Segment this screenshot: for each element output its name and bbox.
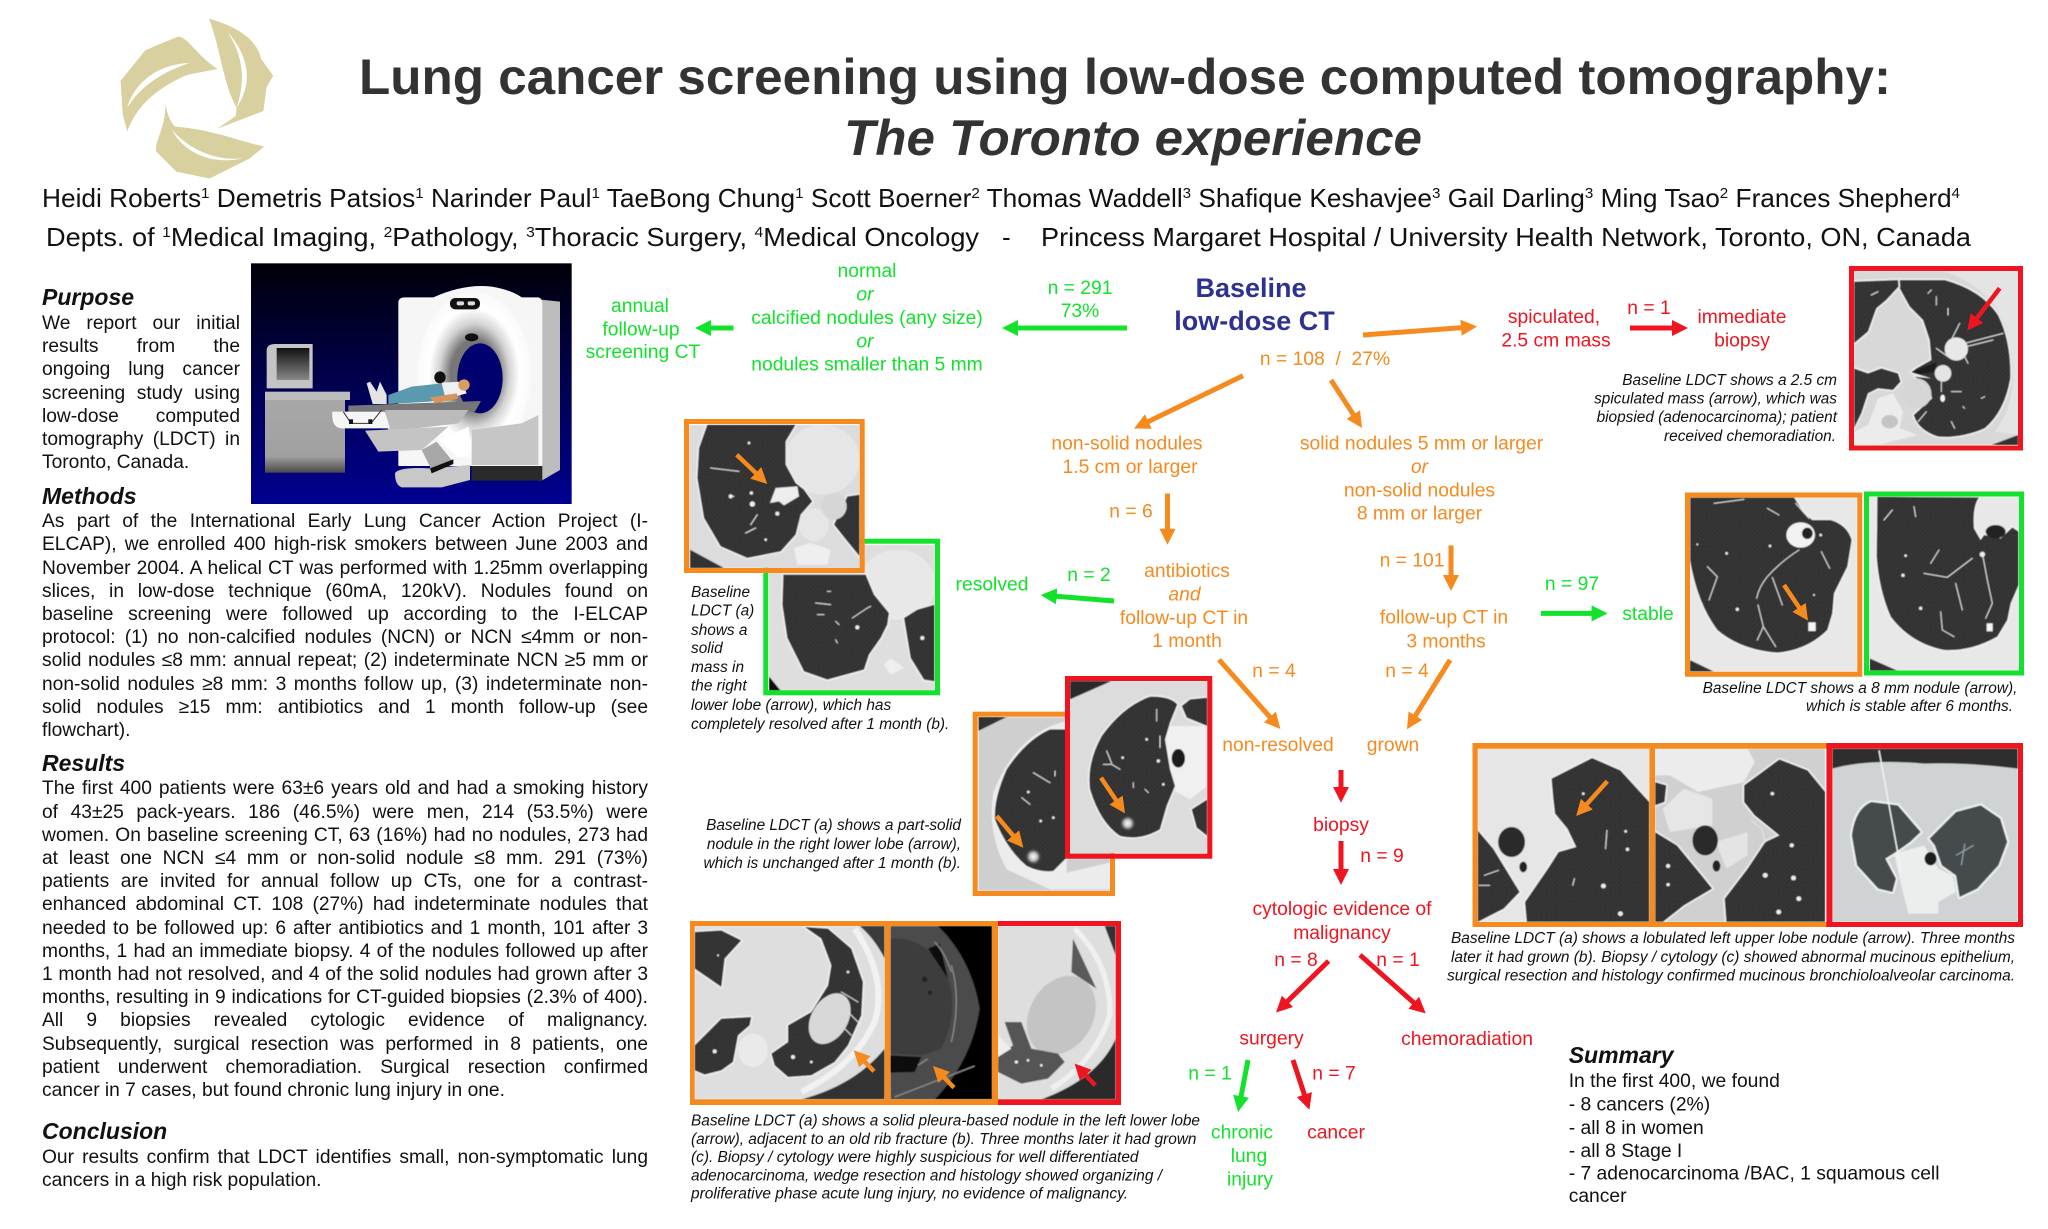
methods text: As part of the International Early Lung Cancer Action Project (I-: [42, 511, 648, 532]
red branch: biopsy and malignancy: n = 9: [1360, 846, 1404, 867]
authors: 1: [592, 185, 600, 202]
caption: resolved mass: Baseline: [691, 584, 750, 601]
caption: stable nodule: which is stable after 6 months.: [1806, 698, 2013, 715]
purpose text: ongoing lung cancer: [42, 359, 240, 380]
red branch: spiculated mass: biopsy: [1714, 331, 1770, 352]
arrow: to non-resolved: [1219, 660, 1277, 725]
affiliations: Depts. of: [46, 222, 150, 252]
green branch: normal findings: calcified nodules (any size): [751, 308, 983, 329]
orange branch: solid nodules: non-solid nodules: [1344, 480, 1495, 502]
summary list: In the first 400, we found: [1569, 1071, 1780, 1092]
results text: at least one NCN ≤4 mm or non-solid nodule ≤8 mm. 291 (73%): [42, 848, 648, 869]
authors: 1: [795, 185, 804, 202]
orange branch: non-solid nodules: antibiotics: [1144, 561, 1230, 582]
image arrows: [997, 778, 1122, 844]
authors: Demetris Patsios: [210, 183, 415, 213]
red branch: spiculated mass: 2.5 cm mass: [1501, 331, 1611, 352]
results text: patient underwent chemoradiation. Surgical resection confirmed: [42, 1057, 648, 1078]
CT images: lobulated nodule triple: [1472, 743, 2023, 927]
authors: 2: [1720, 185, 1728, 202]
authors: Gail Darling: [1440, 183, 1585, 213]
arrow: to chemoradiation: [1360, 955, 1422, 1010]
orange branch: solid nodules: grown: [1367, 735, 1419, 756]
caption: resolved mass: [691, 584, 949, 733]
resolved outcome: resolved: [956, 574, 1028, 596]
orange branch: solid nodules: 8 mm or larger: [1357, 504, 1483, 524]
authors: Scott Boerner: [804, 183, 972, 213]
CT images: resolved mass, green and orange frames: [686, 422, 938, 693]
orange branch: solid nodules: follow-up CT in: [1380, 608, 1508, 628]
caption: part-solid nodule: Baseline LDCT (a) shows a part-solid: [706, 817, 961, 834]
methods text: baseline screening were followed up according to the I-ELCAP: [42, 604, 648, 625]
results text: [42, 778, 648, 1101]
green branch: normal findings: screening CT: [586, 342, 701, 363]
caption: lobulated nodule: [1447, 930, 2015, 985]
arrow: to grown: [1410, 660, 1450, 725]
red branch: biopsy and malignancy: biopsy: [1313, 815, 1369, 836]
chronic lung injury outcome: chronic: [1211, 1122, 1273, 1144]
caption: pleura-based nodule: Baseline LDCT (a) shows a solid pleura-based nodule in the left lower lobe: [691, 1112, 1200, 1130]
results heading: Results: [42, 750, 125, 776]
red branch: spiculated mass: immediate: [1698, 307, 1786, 328]
caption: pleura-based nodule: (c). Biopsy / cytology were highly suspicious for well differentiated: [691, 1149, 1139, 1166]
methods text: flowchart).: [42, 720, 130, 741]
summary list: - all 8 in women: [1569, 1118, 1704, 1139]
conclusion text: Our results confirm that LDCT identifies small, non-symptomatic lung: [42, 1147, 648, 1168]
panel: summary: [1569, 1042, 1940, 1207]
summary list: - 7 adenocarcinoma /BAC, 1 squamous cell: [1569, 1164, 1940, 1184]
purpose heading: Purpose: [42, 284, 134, 310]
red branch: biopsy and malignancy: chemoradiation: [1401, 1029, 1533, 1050]
orange branch: solid nodules: solid nodules 5 mm or larger: [1300, 434, 1544, 454]
green branch: normal findings: 73%: [1061, 301, 1099, 322]
arrow: to cancer: [1293, 1060, 1308, 1105]
image arrows: [857, 1054, 1095, 1088]
stable outcome: stable: [1622, 604, 1674, 625]
red branch: biopsy and malignancy: n = 7: [1312, 1064, 1356, 1084]
caption: pleura-based nodule: adenocarcinoma, wedge resection and histology showed organizing /: [691, 1167, 1164, 1184]
authors: 1: [201, 185, 210, 202]
caption: lobulated nodule: later it had grown (b). Biopsy / cytology (c) showed abnormal mucinous epithelium,: [1451, 949, 2015, 966]
purpose text: tomography (LDCT) in: [42, 429, 240, 450]
arrow: to annual follow-up: [700, 326, 734, 330]
affiliations: -: [1002, 222, 1011, 252]
orange branch: solid nodules: n = 4: [1385, 661, 1429, 682]
affiliations: [46, 222, 1972, 252]
results text: enhanced abdominal CT. 108 (27%) had indeterminate nodules that: [42, 894, 648, 915]
authors: Ming Tsao: [1593, 183, 1720, 213]
flowchart root: baseline low-dose CT: Baseline: [1195, 273, 1307, 303]
methods text: November 2004. A helical CT was performed with 1.25mm overlapping: [42, 558, 648, 579]
caption: lobulated nodule: surgical resection and histology confirmed mucinous bronchioloalveolar carcinoma.: [1447, 968, 2015, 985]
stable outcome: [1545, 574, 1674, 625]
image arrow: [1580, 781, 1607, 812]
arrow: to chronic lung injury: [1239, 1060, 1248, 1107]
methods text: [42, 511, 648, 741]
CT images: part-solid nodule, orange and red frames: [975, 678, 1210, 894]
purpose text: Toronto, Canada.: [42, 452, 189, 473]
arrow: to solid nodules: [1331, 380, 1359, 424]
title: The Toronto experience: [844, 110, 1422, 166]
affiliations: Pathology,: [392, 222, 526, 252]
orange branch: solid nodules: 3 months: [1406, 632, 1486, 652]
caption: stable nodule: [1703, 680, 2017, 715]
orange branch: solid nodules: or: [1411, 457, 1430, 478]
caption: spiculated mass: received chemoradiation.: [1664, 428, 1836, 445]
CT images: pleura-based nodule triple: [690, 921, 1121, 1105]
green branch: normal findings: or: [856, 285, 875, 306]
indeterminate count: n = 108 / 27%: [1260, 349, 1390, 370]
arrow: to normal group: [1007, 326, 1127, 330]
resolved outcome: [956, 565, 1111, 596]
authors: Heidi Roberts: [42, 183, 200, 213]
summary list: - 8 cancers (2%): [1569, 1094, 1710, 1116]
title: [359, 49, 1891, 166]
green branch: normal findings: nodules smaller than 5 mm: [751, 355, 983, 376]
green branch: normal findings: follow-up: [602, 320, 680, 340]
stable outcome: n = 97: [1545, 574, 1599, 595]
orange branch: non-solid nodules: non-resolved: [1222, 735, 1334, 756]
affiliations: 2: [384, 224, 392, 241]
green branch: normal findings: n = 291: [1048, 278, 1112, 299]
conclusion text: cancers in a high risk population.: [42, 1170, 321, 1191]
results text: women. On baseline screening CT, 63 (16%) had no nodules, 273 had: [42, 825, 648, 846]
affiliations: 1: [162, 224, 171, 241]
flowchart root: baseline low-dose CT: [1174, 273, 1335, 336]
caption: resolved mass: solid: [691, 640, 723, 657]
caption: resolved mass: the right: [691, 678, 747, 694]
conclusion text: [42, 1147, 648, 1191]
results text: cancer in 7 cases, but found chronic lung injury in one.: [42, 1080, 505, 1101]
results text: months, 1 had an immediate biopsy. 4 of the nodules followed up after: [42, 941, 648, 962]
authors: Thomas Waddell: [980, 183, 1183, 213]
authors: 3: [1585, 185, 1593, 202]
caption: part-solid nodule: nodule in the right lower lobe (arrow),: [707, 836, 961, 853]
methods text: protocol: (1) no non-calcified nodules (NCN) or NCN ≤4mm or non-: [42, 627, 648, 648]
orange branch: non-solid nodules: n = 6: [1109, 502, 1153, 522]
results text: The first 400 patients were 63±6 years old and had a smoking history: [42, 778, 648, 799]
red branch: biopsy and malignancy: cancer: [1307, 1122, 1366, 1144]
summary list: [1569, 1071, 1940, 1207]
caption: spiculated mass: biopsied (adenocarcinoma); patient: [1597, 409, 1838, 426]
arrow: to spiculated mass: [1363, 327, 1472, 335]
green branch: normal findings: annual: [611, 296, 669, 317]
panel: results: [42, 750, 648, 1101]
results text: 1 month had not resolved, and 4 of the solid nodules had grown after 3: [42, 964, 648, 985]
panel: methods: [42, 483, 648, 741]
illustration: CT scanner with patient: [251, 263, 572, 504]
caption: resolved mass: mass in: [691, 659, 744, 676]
caption: lobulated nodule: Baseline LDCT (a) shows a lobulated left upper lobe nodule (arrow). Three months: [1451, 930, 2015, 947]
red branch: biopsy and malignancy: [1239, 815, 1533, 1144]
methods text: non-solid nodules ≥8 mm: 3 months follow up, (3) indeterminate non-: [42, 674, 648, 695]
purpose text: We report our initial: [42, 313, 240, 334]
caption: resolved mass: lower lobe (arrow), which has: [691, 697, 891, 714]
image arrow: [1970, 288, 2000, 327]
flowchart root: baseline low-dose CT: low-dose CT: [1174, 306, 1335, 336]
caption: resolved mass: shows a: [691, 622, 748, 639]
summary list: cancer: [1569, 1186, 1627, 1207]
results text: All 9 biopsies revealed cytologic evidence of malignancy.: [42, 1010, 648, 1031]
purpose text: [42, 313, 240, 473]
authors: Narinder Paul: [424, 183, 592, 213]
caption: spiculated mass: [1594, 372, 1838, 445]
red branch: spiculated mass: spiculated,: [1508, 307, 1600, 328]
panel: flowchart: [586, 261, 1786, 1190]
results text: needed to be followed up: 6 after antibiotics and 1 month, 101 after 3: [42, 918, 648, 939]
red branch: spiculated mass: [1501, 298, 1786, 352]
orange branch: non-solid nodules: follow-up CT in: [1120, 608, 1248, 629]
red branch: biopsy and malignancy: n = 8: [1274, 950, 1318, 971]
title: Lung cancer screening using low-dose computed tomography:: [359, 49, 1891, 105]
purpose text: screening study using: [42, 383, 240, 404]
affiliations: 4: [755, 224, 763, 241]
resolved outcome: n = 2: [1067, 565, 1111, 586]
authors: Frances Shepherd: [1728, 183, 1952, 213]
chronic lung injury outcome: lung: [1231, 1146, 1267, 1167]
frame bars: [690, 921, 1121, 1105]
red branch: spiculated mass: n = 1: [1627, 298, 1671, 319]
orange branch: non-solid nodules: 1 month: [1152, 631, 1222, 652]
orange branch: solid nodules: [1300, 434, 1544, 756]
authors: 1: [415, 185, 424, 202]
CT image: spiculated mass, red frame: [1852, 268, 2020, 448]
arrow: to antibiotics: [1165, 494, 1170, 540]
results text: of 43±25 pack-years. 186 (46.5%) were men, 214 (53.5%) were: [42, 802, 648, 822]
arrow: to biopsy: [1338, 770, 1344, 798]
conclusion heading: Conclusion: [42, 1118, 167, 1144]
arrow: to cytologic evidence: [1338, 841, 1344, 880]
caption: spiculated mass: spiculated mass (arrow), which was: [1594, 390, 1837, 408]
arrow: to stable: [1541, 611, 1603, 616]
caption: part-solid nodule: which is unchanged after 1 month (b).: [703, 855, 961, 872]
arrow: to surgery: [1280, 961, 1329, 1009]
affiliations: 3: [526, 224, 535, 241]
summary heading: Summary: [1569, 1042, 1675, 1068]
arrow: to 3-month follow-up: [1448, 545, 1454, 586]
red branch: biopsy and malignancy: cytologic evidence of: [1252, 899, 1432, 920]
methods heading: Methods: [42, 483, 137, 509]
arrow: to resolved: [1046, 595, 1114, 601]
affiliations: Thoracic Surgery,: [535, 222, 755, 252]
chronic lung injury outcome: injury: [1227, 1170, 1273, 1190]
authors: 3: [1183, 185, 1191, 202]
affiliations: Medical Oncology: [763, 222, 979, 252]
authors: Shafique Keshavjee: [1191, 183, 1432, 213]
image arrow: [737, 455, 764, 480]
red branch: biopsy and malignancy: malignancy: [1293, 923, 1391, 944]
green branch: normal findings: or: [856, 332, 875, 353]
orange branch: solid nodules: n = 101: [1380, 550, 1444, 572]
purpose text: low-dose computed: [42, 406, 240, 427]
authors: 2: [971, 185, 980, 202]
arrow: to non-solid nodules: [1138, 376, 1243, 426]
red branch: biopsy and malignancy: surgery: [1239, 1028, 1304, 1050]
caption: resolved mass: completely resolved after 1 month (b).: [691, 716, 949, 733]
methods text: slices, in low-dose technique (60mA, 120kV). Nodules found on: [42, 581, 648, 602]
results text: months, resulting in 9 indications for CT-guided biopsies (2.3% of 400).: [42, 987, 648, 1008]
methods text: solid nodules ≤8 mm: annual repeat; (2) indeterminate NCN ≥5 mm or: [42, 650, 648, 671]
caption: part-solid nodule: [703, 817, 961, 872]
red branch: biopsy and malignancy: n = 1: [1376, 950, 1420, 971]
caption: resolved mass: LDCT (a): [691, 602, 754, 620]
purpose text: results from the: [42, 336, 240, 357]
frame bars: [1472, 743, 2023, 927]
caption: pleura-based nodule: proliferative phase acute lung injury, no evidence of malignancy.: [690, 1186, 1128, 1203]
green branch: normal findings: [586, 261, 1112, 376]
arrow: to immediate biopsy: [1630, 326, 1683, 330]
image arrow: [1784, 585, 1805, 616]
authors: 4: [1952, 185, 1960, 202]
methods text: solid nodules ≥15 mm: antibiotics and 1 month follow-up (see: [42, 697, 648, 718]
caption: stable nodule: Baseline LDCT shows a 8 mm nodule (arrow),: [1703, 680, 2017, 697]
orange branch: non-solid nodules: and: [1168, 585, 1202, 606]
orange branch: non-solid nodules: [1051, 434, 1334, 756]
authors: 3: [1432, 185, 1440, 202]
green branch: normal findings: normal: [838, 261, 896, 282]
orange branch: non-solid nodules: 1.5 cm or larger: [1062, 457, 1198, 478]
authors: TaeBong Chung: [600, 183, 795, 213]
chronic lung injury outcome: n = 1: [1188, 1064, 1232, 1084]
summary list: - all 8 Stage I: [1569, 1141, 1682, 1162]
chronic lung injury outcome: [1188, 1064, 1273, 1190]
affiliations: Princess Margaret Hospital / University Health Network, Toronto, ON, Canada: [1041, 222, 1972, 252]
methods text: ELCAP), we enrolled 400 high-risk smokers between June 2003 and: [42, 534, 648, 555]
caption: spiculated mass: Baseline LDCT shows a 2.5 cm: [1622, 372, 1837, 389]
results text: patients are invited for annual follow up CTs, one for a contrast-: [42, 871, 648, 892]
panel: purpose: [42, 284, 240, 473]
orange branch: non-solid nodules: n = 4: [1252, 661, 1296, 682]
CT images: stable nodule, orange and green frames: [1688, 494, 2022, 674]
panel: conclusion: [42, 1118, 648, 1191]
affiliations: Medical Imaging,: [171, 222, 384, 252]
caption: pleura-based nodule: [690, 1112, 1200, 1203]
orange branch: non-solid nodules: non-solid nodules: [1051, 434, 1203, 454]
caption: pleura-based nodule: (arrow), adjacent to an old rib fracture (b). Three months later it had grown: [691, 1131, 1196, 1148]
results text: Subsequently, surgical resection was performed in 8 patients, one: [42, 1034, 648, 1055]
logo: three leaf faces: [121, 19, 273, 178]
